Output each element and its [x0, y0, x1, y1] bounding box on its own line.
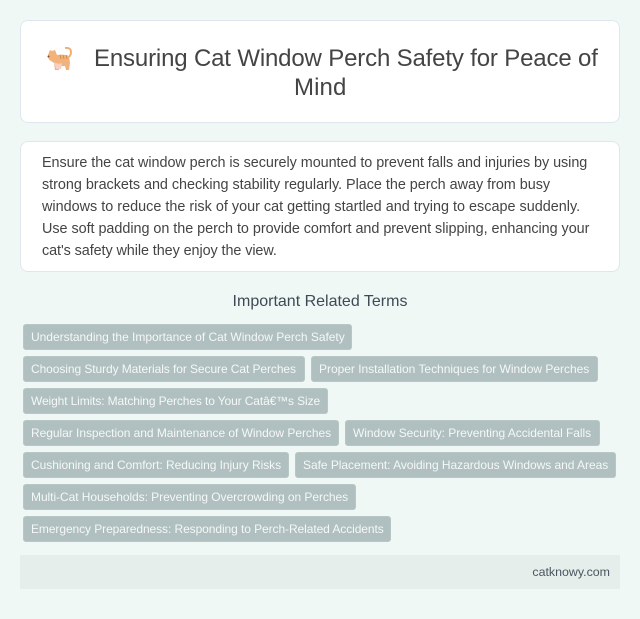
summary panel — [20, 141, 620, 272]
related terms tags — [23, 324, 616, 542]
tag: Choosing Sturdy Materials for Secure Cat Perches — [31, 362, 296, 376]
tag: Multi-Cat Households: Preventing Overcrowding on Perches — [31, 490, 348, 504]
tag: Proper Installation Techniques for Window Perches — [319, 362, 589, 376]
tag — [23, 484, 356, 510]
summary text: Ensure the cat window perch is securely mounted to prevent falls and injuries by using — [42, 155, 587, 171]
tag — [23, 324, 352, 350]
summary text: windows to reduce the risk of your cat getting startled and trying to escape suddenly. — [42, 199, 580, 215]
icon: cat — [48, 47, 72, 70]
related terms heading: Important Related Terms — [233, 293, 407, 310]
tag — [345, 420, 600, 446]
title: Ensuring Cat Window Perch Safety for Peace of — [94, 45, 598, 72]
footer bar — [20, 555, 620, 589]
tag — [311, 356, 598, 382]
title: Mind — [294, 74, 346, 101]
tag — [23, 420, 339, 446]
tag: Weight Limits: Matching Perches to Your Catâ€™s Size — [31, 394, 320, 408]
tag: Understanding the Importance of Cat Window Perch Safety — [31, 330, 345, 344]
tag — [23, 452, 289, 478]
summary text: Use soft padding on the perch to provide comfort and prevent slipping, enhancing your — [42, 221, 589, 237]
footer source: catknowy.com — [532, 565, 610, 579]
tag: Emergency Preparedness: Responding to Perch-Related Accidents — [31, 522, 384, 536]
tag — [23, 356, 305, 382]
title — [94, 45, 598, 101]
header panel — [20, 20, 620, 123]
tag: Cushioning and Comfort: Reducing Injury Risks — [31, 458, 281, 472]
tag: Regular Inspection and Maintenance of Window Perches — [31, 426, 331, 440]
summary text: strong brackets and checking stability regularly. Place the perch away from busy — [42, 177, 550, 193]
summary text — [42, 155, 590, 259]
tag: Safe Placement: Avoiding Hazardous Windows and Areas — [303, 458, 608, 472]
tag — [295, 452, 616, 478]
tag — [23, 516, 391, 542]
tag: Window Security: Preventing Accidental Falls — [353, 426, 591, 440]
tag — [23, 388, 328, 414]
summary text: cat's safety while they enjoy the view. — [42, 243, 277, 259]
